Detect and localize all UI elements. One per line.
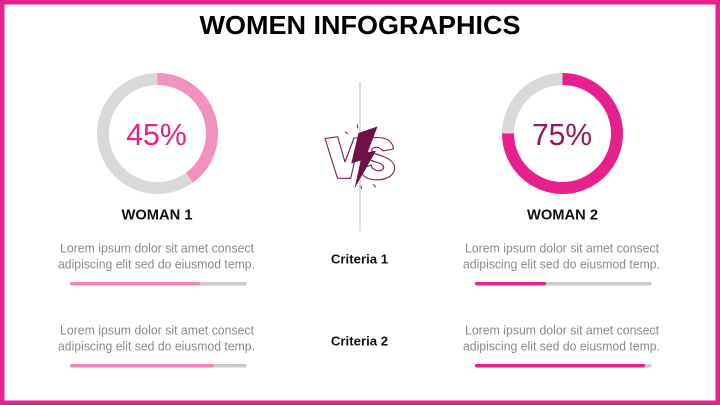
panel: woman 1 [58, 79, 255, 368]
text block: woman 1 criteria 1: Lorem ipsum dolor sit amet consect [60, 242, 255, 256]
vs divider line [359, 82, 361, 231]
text block: woman 2 criteria 2 [463, 324, 660, 354]
progress bar: woman 1 criteria 1 [70, 282, 246, 286]
text block: woman 2 criteria 2: adipiscing elit sed do eiusmod temp. [463, 340, 660, 354]
donut chart: woman 1 45%: 45% [126, 118, 187, 152]
text block: woman 1 criteria 2: adipiscing elit sed do eiusmod temp. [58, 340, 255, 354]
text block: woman 2 criteria 1: Lorem ipsum dolor sit amet consect [465, 242, 660, 256]
heading: woman 1: WOMAN 1 [122, 207, 192, 223]
title: WOMEN INFOGRAPHICS [200, 10, 520, 40]
text block: woman 1 criteria 2 [58, 324, 255, 354]
label: criteria 2: Criteria 2 [331, 334, 388, 349]
progress bar: woman 1 criteria 2 [70, 364, 246, 368]
donut chart: woman 2 75%: 75% [532, 118, 592, 152]
heading: woman 2: WOMAN 2 [527, 207, 598, 223]
progress bar: woman 2 criteria 2 [475, 364, 652, 368]
donut chart: woman 2 75% [508, 79, 617, 188]
icon: VS lightning bolt [325, 124, 395, 189]
text block: woman 1 criteria 2: Lorem ipsum dolor sit amet consect [60, 324, 255, 338]
text block: woman 2 criteria 1: adipiscing elit sed do eiusmod temp. [463, 258, 660, 272]
donut chart: woman 1 45% [103, 79, 212, 188]
label: criteria 1: Criteria 1 [331, 252, 388, 266]
text block: woman 1 criteria 1 [58, 242, 255, 272]
text block: woman 2 criteria 1 [463, 242, 660, 272]
text block: woman 1 criteria 1: adipiscing elit sed do eiusmod temp. [58, 258, 255, 272]
text block: woman 2 criteria 2: Lorem ipsum dolor sit amet consect [465, 324, 660, 338]
panel: woman 2 [463, 79, 660, 368]
progress bar: woman 2 criteria 1 [475, 282, 652, 286]
